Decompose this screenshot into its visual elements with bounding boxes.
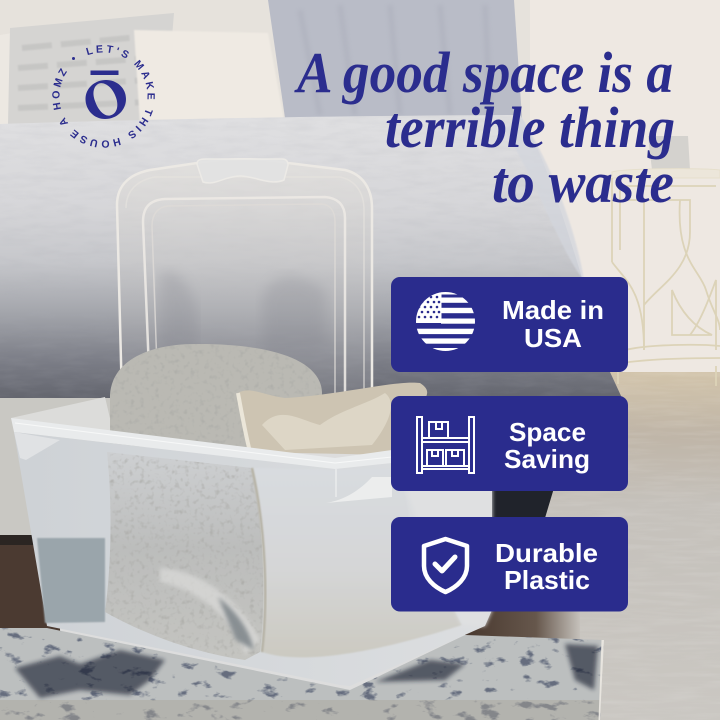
clear plastic storage box [11, 418, 492, 686]
slogan dot [72, 57, 75, 60]
brand logo badge [52, 45, 155, 148]
icon: shield with check [424, 539, 467, 592]
wood floor [480, 372, 720, 720]
inner back rim of the box [11, 397, 115, 440]
pillow piping [252, 468, 265, 652]
box body [14, 432, 492, 686]
wood floor grain [480, 372, 720, 720]
blanket side fringe [505, 115, 584, 280]
second shadow seen through lid [262, 276, 325, 350]
corner notch [14, 432, 60, 460]
wall [0, 0, 720, 400]
label line 2: USA [524, 323, 582, 353]
dark item behind box [488, 488, 554, 518]
shadows seen through lid [160, 271, 197, 350]
box rim [11, 418, 392, 469]
dark rectangle through box [37, 538, 105, 623]
label line 1: Made in [502, 295, 604, 325]
logo ring [86, 80, 126, 119]
lid handle [197, 159, 288, 183]
headboard [0, 0, 530, 130]
badge: Durable Plastic [391, 517, 628, 612]
headline line 1: A good space is a [294, 40, 673, 105]
pillow seen through box [252, 468, 462, 657]
back pillow white [134, 30, 284, 124]
label line 1: Durable [495, 538, 598, 568]
circular slogan: LET'S MAKE THIS HOUSE A HOMZ [52, 45, 155, 148]
rolled fleece blanket above the box rim [110, 344, 322, 452]
back pillow left [8, 13, 174, 124]
rug dark patches [15, 644, 598, 698]
bed wrinkles [0, 112, 630, 402]
label line 1: Space [509, 417, 586, 447]
decorative pillow above the box rim [238, 383, 427, 455]
icon: USA flag globe [416, 292, 476, 352]
rug [0, 625, 606, 720]
dark gap through box [218, 597, 254, 650]
rim seam [335, 469, 337, 497]
far left cushion [0, 30, 30, 124]
rug pattern [0, 625, 606, 720]
blanket fold through box [160, 568, 260, 655]
headline line 2: terrible thing [385, 95, 675, 160]
bed blanket [0, 115, 622, 398]
brown floor behind box [465, 611, 580, 641]
icon: warehouse shelf with boxes [417, 417, 474, 473]
floor under bed [0, 535, 60, 635]
logo bar [90, 70, 118, 75]
badge: Space Saving [391, 396, 628, 491]
label line 2: Saving [504, 444, 590, 474]
corner handle [326, 477, 392, 503]
headline line 3: to waste [492, 150, 674, 215]
label line 2: Plastic [504, 565, 590, 595]
back pillow grey large [268, 0, 522, 118]
side table [612, 136, 720, 386]
bed base [0, 398, 120, 535]
fleece seen through box [105, 452, 263, 660]
shadow strip under bed [0, 535, 60, 545]
badge: Made in USA [391, 277, 628, 372]
storage lid leaning behind the box [117, 159, 372, 400]
rim highlight [15, 423, 392, 463]
box right side bright [400, 450, 492, 626]
